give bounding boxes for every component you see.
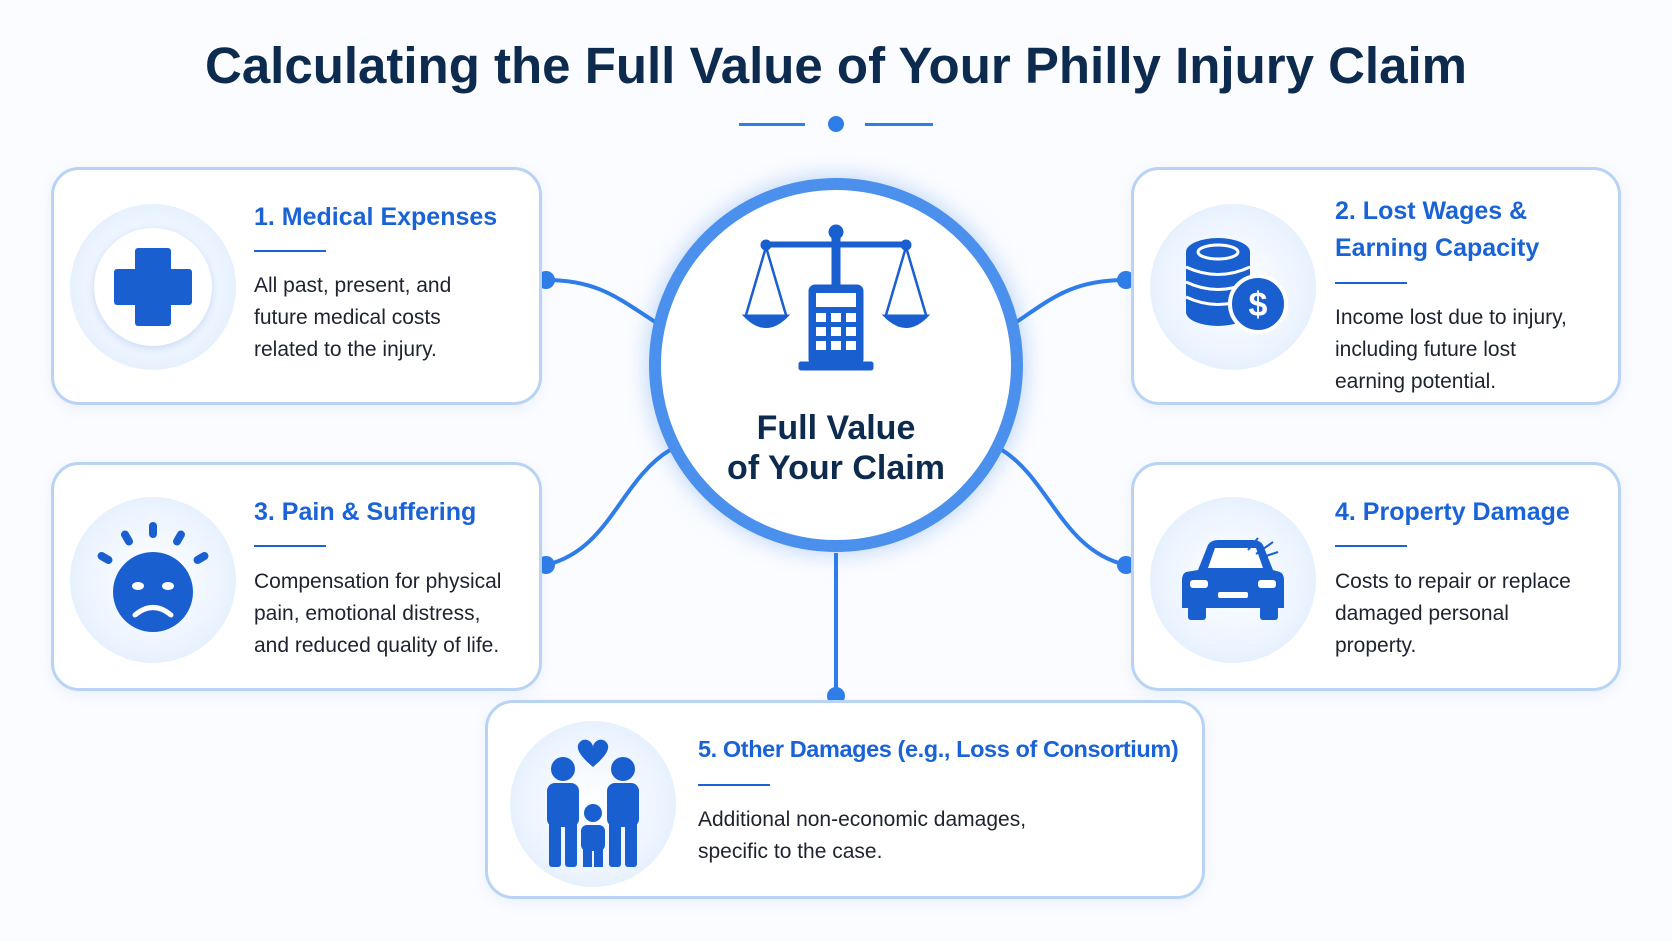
panel: other damages: 5. Other Damages (e.g., Loss of Consortium)	[698, 736, 1178, 762]
title divider	[739, 116, 933, 132]
panel: property damage	[1131, 462, 1621, 691]
panel: pain and suffering	[51, 462, 542, 691]
icon: medical cross	[70, 204, 236, 370]
panel: medical expenses: 1. Medical Expenses	[254, 203, 497, 231]
panel: lost wages	[1131, 167, 1621, 405]
panel: other damages: specific to the case.	[698, 840, 882, 863]
panel: other damages	[485, 700, 1205, 899]
panel: lost wages: including future lost	[1335, 338, 1516, 361]
panel: pain and suffering: and reduced quality of life.	[254, 634, 499, 657]
panel: lost wages: 2. Lost Wages &	[1335, 197, 1527, 225]
panel: medical expenses: related to the injury.	[254, 338, 437, 361]
center label: of Your Claim	[727, 449, 945, 487]
panel: medical expenses	[51, 167, 542, 405]
panel: medical expenses: All past, present, and	[254, 274, 451, 297]
panel: lost wages: earning potential.	[1335, 370, 1496, 393]
icon: sad face	[70, 497, 236, 663]
icon: coins with dollar	[1150, 204, 1316, 370]
icon: family with heart	[510, 721, 676, 887]
panel: lost wages: Earning Capacity	[1335, 234, 1539, 262]
panel: other damages: Additional non-economic damages,	[698, 808, 1026, 831]
icon: damaged car	[1150, 497, 1316, 663]
panel: property damage: damaged personal	[1335, 602, 1509, 625]
panel: medical expenses: future medical costs	[254, 306, 441, 329]
icon: scale with calculator	[742, 224, 930, 370]
panel: property damage: property.	[1335, 634, 1416, 657]
panel: property damage: Costs to repair or replace	[1335, 570, 1571, 593]
center label: Full Value	[757, 409, 915, 447]
panel: property damage: 4. Property Damage	[1335, 498, 1570, 526]
title: Calculating the Full Value of Your Philly Injury Claim	[205, 37, 1467, 94]
panel: lost wages: Income lost due to injury,	[1335, 306, 1567, 329]
panel: pain and suffering: pain, emotional distress,	[254, 602, 480, 625]
center circle	[649, 178, 1023, 552]
panel: pain and suffering: 3. Pain & Suffering	[254, 498, 476, 526]
panel: pain and suffering: Compensation for physical	[254, 570, 501, 593]
icon: coins with dollar: $	[1249, 286, 1268, 324]
center label	[727, 409, 945, 487]
